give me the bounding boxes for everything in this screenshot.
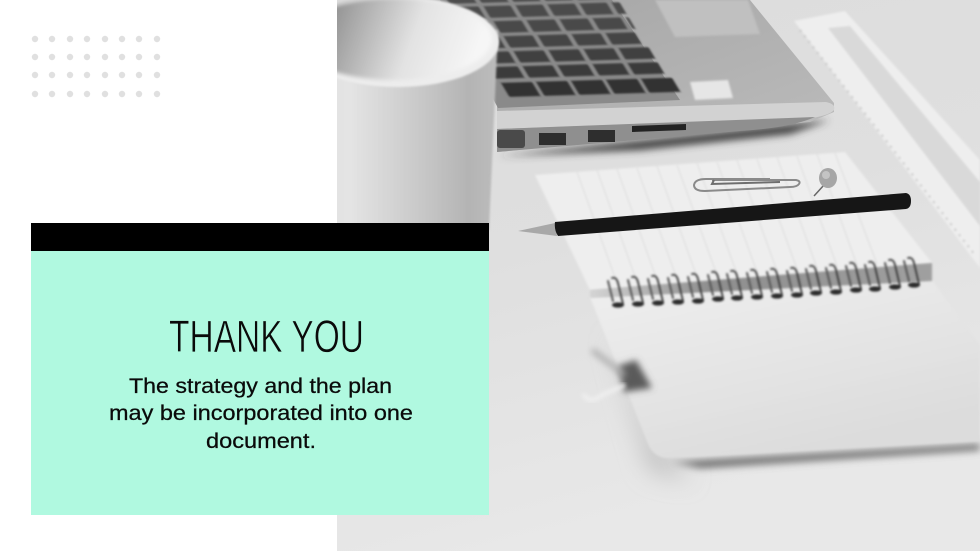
notebook spine — [590, 263, 932, 298]
trackpad — [655, 0, 760, 37]
ruler — [794, 11, 980, 268]
notebook lower page shadow — [670, 444, 980, 468]
body text: The strategy and the plan — [129, 375, 392, 398]
notebook lower page — [590, 280, 980, 458]
ports — [497, 130, 525, 148]
spiral binding — [608, 258, 920, 308]
pencil — [518, 193, 911, 236]
side panel — [497, 117, 815, 152]
photo: desk with laptop, mug and notebook — [296, 0, 980, 551]
notebook upper page — [535, 152, 932, 290]
paperclip — [694, 179, 800, 191]
coffee mug — [337, 0, 500, 230]
black header bar — [31, 223, 489, 251]
mint text panel — [31, 251, 489, 515]
laptop — [420, 0, 834, 156]
heading: thank you: THANK YOU — [169, 311, 364, 362]
body text: document. — [206, 430, 316, 453]
body text: may be incorporated into one — [109, 402, 413, 425]
keys — [446, 0, 679, 90]
keyboard well — [440, 0, 680, 108]
blurred binder clip — [583, 350, 652, 400]
body text — [109, 375, 413, 453]
front lip — [497, 102, 834, 129]
push pin — [814, 168, 837, 196]
sticker — [690, 80, 733, 100]
dot grid decoration — [32, 36, 160, 97]
